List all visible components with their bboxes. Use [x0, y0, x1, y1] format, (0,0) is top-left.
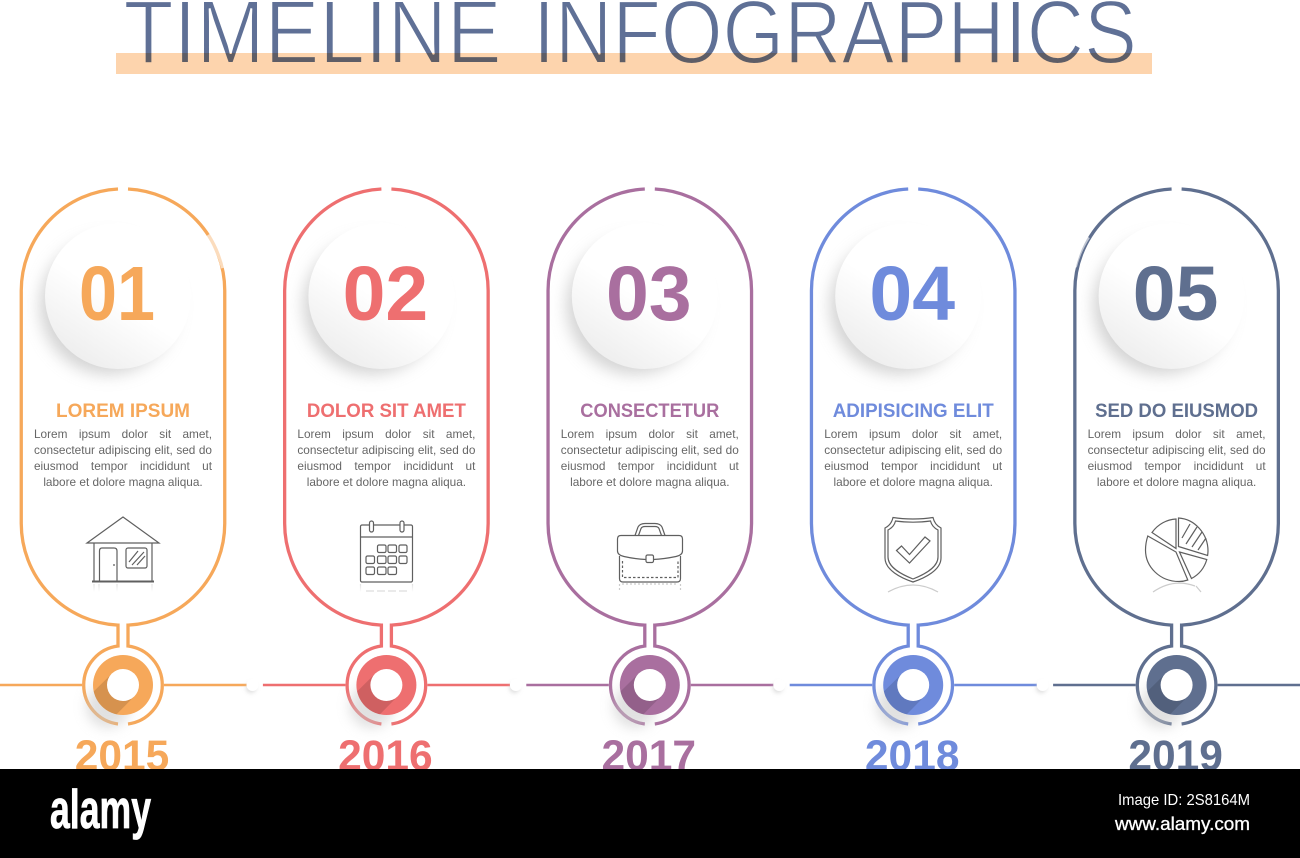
year: 2016	[338, 733, 433, 780]
marker	[86, 655, 153, 728]
timeline line	[526, 684, 774, 686]
number: 02	[343, 251, 428, 337]
number disc	[1094, 223, 1245, 374]
year: 2019	[1128, 733, 1223, 780]
icon: briefcase	[618, 524, 682, 592]
text block: consectetur adipiscing elit, sed do	[297, 443, 475, 457]
heading: ADIPISICING ELIT	[833, 401, 994, 422]
connector dot	[246, 679, 258, 693]
panel: step 05 2019	[1053, 189, 1300, 780]
timeline line	[790, 684, 1037, 686]
number: 01	[79, 251, 155, 337]
year: 2015	[75, 733, 169, 780]
panel: step 01 2015	[0, 189, 258, 780]
title	[116, 0, 1152, 83]
number disc	[303, 223, 454, 374]
marker	[1140, 655, 1207, 728]
marker	[876, 655, 943, 728]
text block: eiusmod tempor incididunt ut	[824, 459, 1002, 473]
timeline line	[0, 684, 247, 686]
number disc	[830, 223, 981, 374]
text block: labore et dolore magna aliqua.	[570, 475, 729, 489]
icon: house	[87, 517, 159, 592]
logo: alamy	[50, 778, 151, 840]
connector dot	[509, 679, 522, 693]
capsule outline	[285, 189, 488, 724]
text block	[824, 426, 1002, 490]
text block: eiusmod tempor incididunt ut	[1088, 459, 1266, 473]
capsule outline	[811, 189, 1015, 724]
text block: eiusmod tempor incididunt ut	[34, 459, 212, 473]
text block: eiusmod tempor incididunt ut	[561, 459, 739, 473]
icon: pie chart	[1146, 518, 1208, 592]
icon: calendar	[360, 521, 412, 592]
number disc	[567, 223, 718, 374]
text block	[561, 426, 739, 490]
text block: Lorem ipsum dolor sit amet,	[297, 427, 475, 441]
text block	[34, 426, 212, 490]
text block: Lorem ipsum dolor sit amet,	[824, 427, 1002, 441]
text block: Lorem ipsum dolor sit amet,	[34, 427, 212, 441]
number: 04	[869, 251, 955, 337]
heading: CONSECTETUR	[580, 401, 720, 422]
text block: Lorem ipsum dolor sit amet,	[561, 427, 739, 441]
text block: labore et dolore magna aliqua.	[307, 475, 466, 489]
heading: SED DO EIUSMOD	[1095, 401, 1258, 422]
text block: labore et dolore magna aliqua.	[1097, 475, 1256, 489]
heading: DOLOR SIT AMET	[307, 401, 466, 422]
text block: consectetur adipiscing elit, sed do	[1088, 443, 1266, 457]
website: www.alamy.com	[1114, 814, 1250, 834]
text block: labore et dolore magna aliqua.	[43, 475, 203, 489]
capsule outline	[1075, 189, 1278, 724]
footer bar	[0, 769, 1300, 858]
panel: step 03 2017	[526, 189, 785, 780]
capsule outline	[21, 189, 225, 724]
text block: Lorem ipsum dolor sit amet,	[1088, 427, 1266, 441]
text block: consectetur adipiscing elit, sed do	[561, 443, 739, 457]
text block	[1088, 426, 1266, 490]
number disc	[40, 223, 191, 374]
year: 2018	[865, 733, 959, 780]
number: 05	[1133, 251, 1218, 337]
panel: step 04 2018	[790, 189, 1049, 780]
text block	[297, 426, 475, 490]
text block: eiusmod tempor incididunt ut	[297, 459, 475, 473]
connector dot	[1036, 679, 1049, 693]
timeline line	[1053, 684, 1300, 686]
panel: step 02 2016	[263, 189, 522, 780]
connector dot	[773, 679, 785, 693]
icon: shield	[885, 518, 941, 592]
marker	[613, 655, 680, 728]
capsule outline	[548, 189, 752, 724]
heading: LOREM IPSUM	[56, 401, 190, 422]
timeline line	[263, 684, 510, 686]
text block: labore et dolore magna aliqua.	[834, 475, 993, 489]
marker	[349, 655, 416, 728]
text block: consectetur adipiscing elit, sed do	[34, 443, 212, 457]
text block: consectetur adipiscing elit, sed do	[824, 443, 1002, 457]
number: 03	[606, 251, 692, 337]
image id: Image ID: 2S8164M	[1118, 792, 1250, 809]
year: 2017	[602, 733, 696, 780]
